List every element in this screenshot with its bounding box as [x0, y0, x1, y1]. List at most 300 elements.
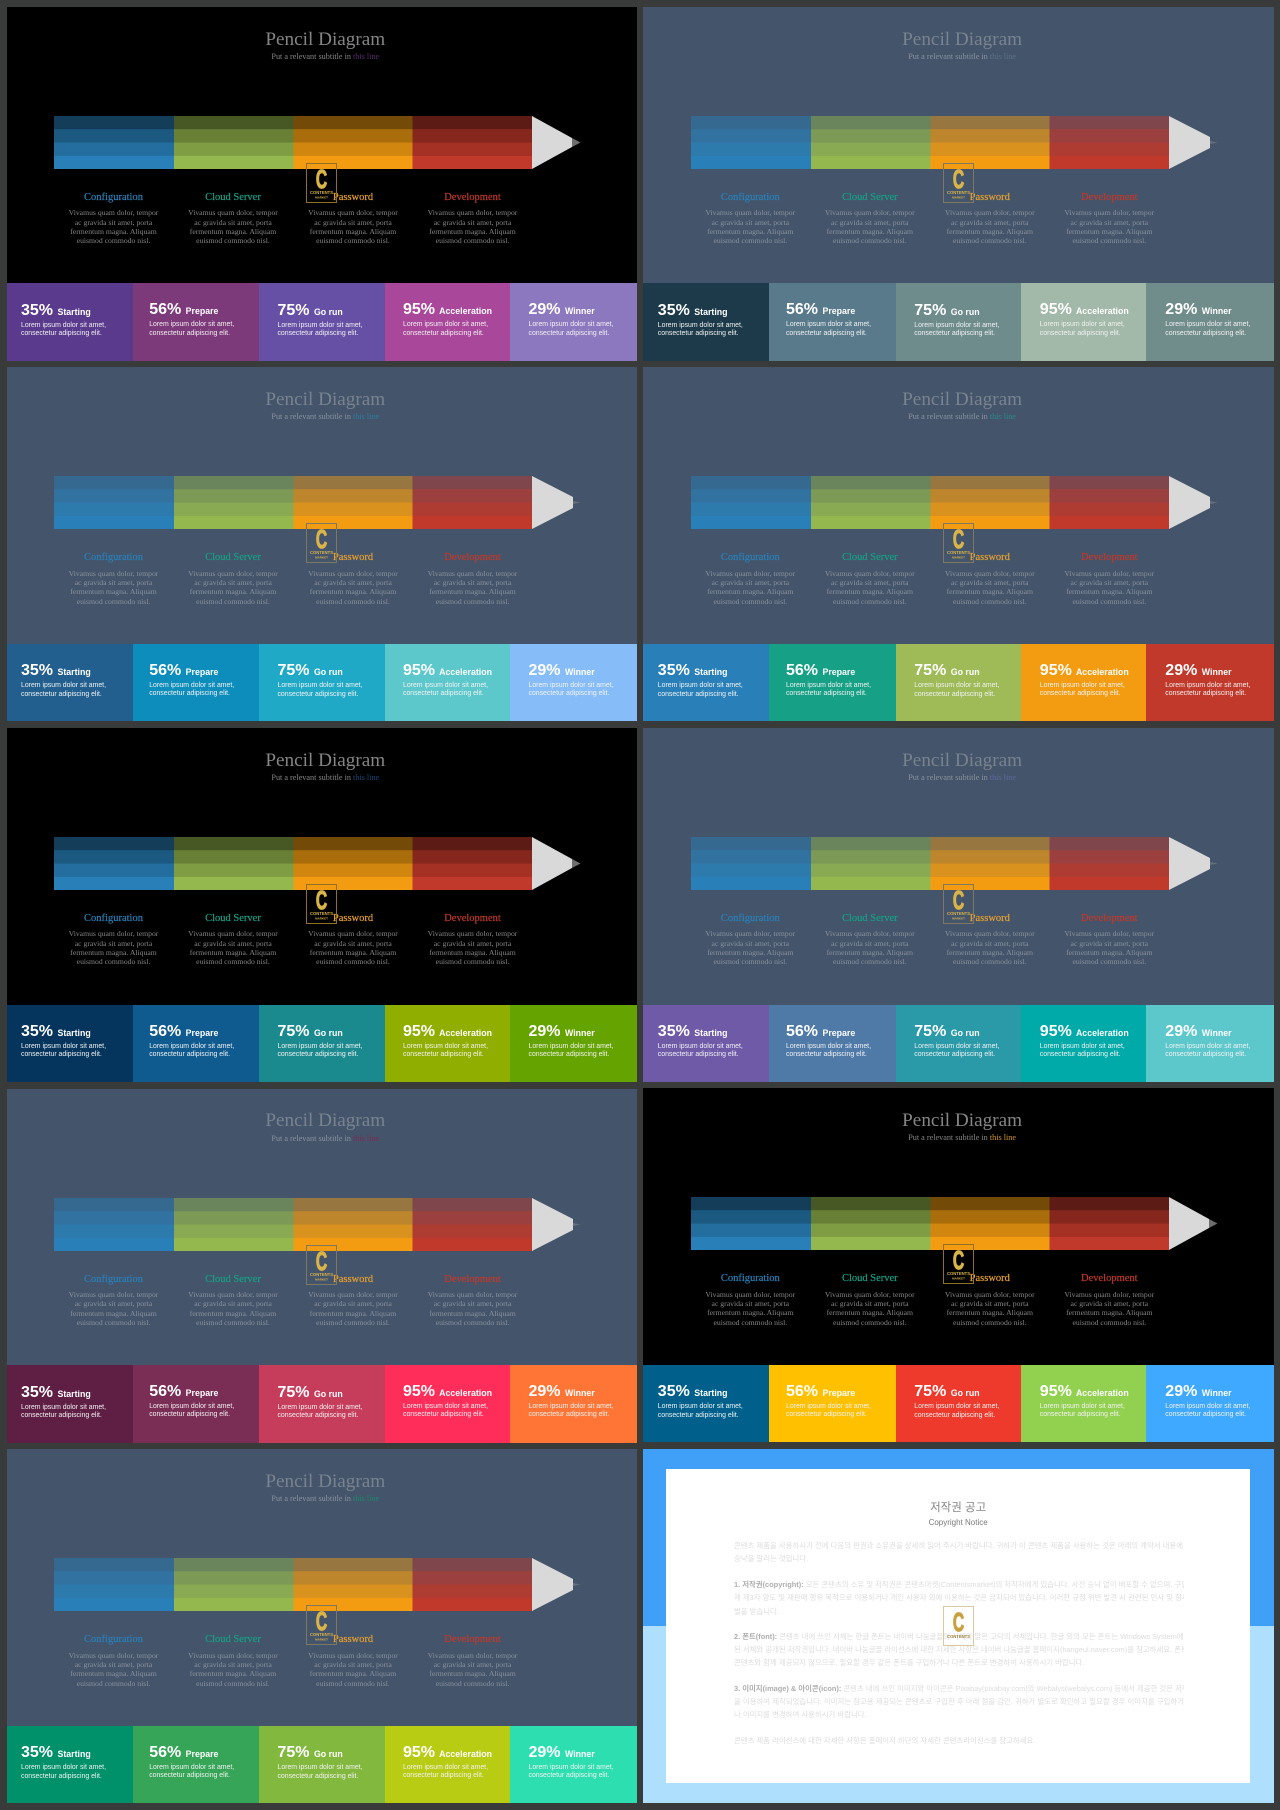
stat: starting: 35% Starting [658, 1383, 728, 1400]
stat: prepare [769, 283, 897, 361]
stat: winner: Lorem ipsum dolor sit amet, [528, 682, 614, 689]
column: cloud server: Vivamus quam dolor, tempor [825, 569, 915, 578]
column: configuration: Configuration [721, 192, 780, 203]
column: password: Vivamus quam dolor, tempor [945, 929, 1035, 938]
watermark icon: MARKET [315, 196, 328, 200]
panel: slide 1 black purple [6, 7, 637, 361]
column: development: fermentum magna. Aliquam [1066, 1308, 1153, 1317]
column: cloud server: Cloud Server [205, 192, 261, 203]
stat: winner: consectetur adipiscing elit. [1165, 1411, 1246, 1418]
column: configuration: euismod commodo nisl. [77, 1318, 150, 1327]
column: password [945, 192, 1035, 245]
column: development: Development [1081, 192, 1138, 203]
column: cloud server: fermentum magna. Aliquam [190, 227, 276, 236]
column: password [308, 913, 398, 966]
column: cloud server: ac gravida sit amet, porta [831, 939, 909, 948]
stat: acceleration: consectetur adipiscing elit. [1040, 1411, 1121, 1418]
stat: winner: 29% Winner [1165, 301, 1232, 318]
stat: starting: consectetur adipiscing elit. [21, 691, 102, 698]
column: password: ac gravida sit amet, porta [314, 218, 392, 227]
stat: winner [510, 1005, 637, 1082]
column: cloud server: ac gravida sit amet, porta [831, 218, 909, 227]
column: configuration: Vivamus quam dolor, tempor [705, 929, 795, 938]
column: cloud server: euismod commodo nisl. [833, 957, 907, 966]
stat: starting: 35% Starting [21, 302, 91, 319]
column: configuration: Vivamus quam dolor, tempor [69, 1651, 158, 1660]
watermark icon [943, 523, 974, 563]
stat: prepare: 56% Prepare [786, 662, 855, 679]
column: configuration [68, 552, 158, 606]
column: password: euismod commodo nisl. [953, 957, 1027, 966]
stat: prepare: Lorem ipsum dolor sit amet, [149, 1043, 234, 1050]
column: cloud server: euismod commodo nisl. [196, 1679, 270, 1688]
column: cloud server: Cloud Server [205, 552, 261, 563]
column: password: Vivamus quam dolor, tempor [308, 929, 398, 938]
stat: prepare: 56% Prepare [149, 1383, 218, 1400]
column: development: ac gravida sit amet, porta [434, 218, 511, 227]
stat: starting: consectetur adipiscing elit. [21, 330, 102, 337]
column: password: euismod commodo nisl. [316, 236, 390, 245]
notice body text: 나 이미지를 변경하여 사용하시기 바랍니다. [734, 1710, 867, 1719]
title: Pencil Diagram [265, 28, 385, 50]
column: development: fermentum magna. Aliquam [429, 1669, 516, 1678]
stat: starting: consectetur adipiscing elit. [21, 1412, 102, 1419]
stat: winner: consectetur adipiscing elit. [528, 1051, 609, 1058]
column: development: Development [444, 552, 501, 563]
stat: prepare: Lorem ipsum dolor sit amet, [786, 1043, 871, 1050]
column: password: euismod commodo nisl. [953, 1318, 1027, 1327]
stat: go run: consectetur adipiscing elit. [277, 691, 358, 698]
stat: go run [259, 644, 385, 721]
pencil diagram [54, 1558, 584, 1612]
column: cloud server: Cloud Server [842, 552, 898, 563]
column: development: ac gravida sit amet, porta [1071, 939, 1148, 948]
column: cloud server [815, 1272, 925, 1327]
title: Pencil Diagram [902, 389, 1022, 410]
column: cloud server: Vivamus quam dolor, tempor [188, 1290, 278, 1299]
watermark icon: C [953, 525, 964, 554]
watermark icon [306, 884, 337, 924]
stat: go run: consectetur adipiscing elit. [277, 1412, 358, 1419]
column: password: fermentum magna. Aliquam [310, 1309, 396, 1318]
column: configuration: Vivamus quam dolor, tempor [705, 1290, 795, 1299]
stat: acceleration: 95% Acceleration [403, 1023, 492, 1040]
stat: prepare: consectetur adipiscing elit. [786, 1051, 867, 1058]
column: password: Vivamus quam dolor, tempor [308, 569, 398, 578]
column: configuration: euismod commodo nisl. [713, 1318, 787, 1327]
watermark icon: C [953, 1246, 964, 1275]
column: cloud server: ac gravida sit amet, porta [831, 578, 909, 587]
column: cloud server: fermentum magna. Aliquam [827, 227, 913, 236]
stat: acceleration: 95% Acceleration [403, 1383, 492, 1400]
stat: prepare: consectetur adipiscing elit. [786, 1411, 867, 1418]
stat: go run [896, 1005, 1022, 1082]
column: cloud server: Vivamus quam dolor, tempor [188, 208, 278, 217]
stat: starting [643, 644, 770, 721]
stat: go run [896, 1365, 1022, 1442]
column: password: Password [333, 1634, 373, 1645]
stat: winner: Lorem ipsum dolor sit amet, [1165, 1043, 1250, 1050]
panel: slide 7 slate crimson [6, 1089, 637, 1443]
column: development: Vivamus quam dolor, tempor [1064, 929, 1154, 938]
stat: winner: 29% Winner [528, 662, 595, 679]
stat: acceleration: Lorem ipsum dolor sit amet, [403, 1764, 488, 1771]
stat: go run [259, 1005, 385, 1082]
stat: winner: Lorem ipsum dolor sit amet, [1165, 682, 1250, 689]
column: development: Vivamus quam dolor, tempor [428, 1651, 517, 1660]
column: development: Vivamus quam dolor, tempor [428, 929, 517, 938]
stat: winner: Lorem ipsum dolor sit amet, [528, 1403, 614, 1410]
watermark icon: MARKET [315, 917, 328, 921]
stat: go run: 75% Go run [914, 1383, 980, 1400]
column: cloud server: euismod commodo nisl. [833, 236, 907, 245]
stat: starting [643, 1365, 770, 1442]
stat: winner [510, 283, 637, 361]
column: development: fermentum magna. Aliquam [429, 1309, 516, 1318]
watermark icon: C [316, 165, 327, 194]
stat: go run: 75% Go run [277, 1384, 343, 1401]
watermark icon [943, 1606, 974, 1646]
stat: winner [1146, 283, 1274, 361]
column: configuration: Vivamus quam dolor, tempor [69, 1290, 158, 1299]
column: configuration: Configuration [84, 1274, 143, 1285]
stat: go run: consectetur adipiscing elit. [914, 330, 995, 337]
column: password: fermentum magna. Aliquam [947, 587, 1033, 596]
column: password: Password [970, 913, 1010, 924]
watermark icon [943, 884, 974, 924]
stat: prepare: Lorem ipsum dolor sit amet, [786, 1403, 871, 1410]
stat: go run: 75% Go run [277, 302, 343, 319]
column: development: euismod commodo nisl. [436, 597, 509, 606]
notice body text: 승낙을 알리는 것입니다. [734, 1554, 808, 1563]
column: cloud server: Cloud Server [205, 913, 261, 924]
column: development [1054, 912, 1164, 967]
column: cloud server [178, 1273, 288, 1327]
watermark icon: MARKET [952, 1277, 965, 1281]
column: configuration [695, 1272, 805, 1327]
watermark icon: C [316, 886, 327, 915]
column: password: Vivamus quam dolor, tempor [945, 569, 1035, 578]
watermark icon: C [316, 1607, 327, 1636]
column: development: Development [444, 192, 501, 203]
stat: starting: 35% Starting [21, 1023, 91, 1040]
column: password [298, 1273, 408, 1327]
stat: go run: 75% Go run [277, 662, 343, 679]
column: development: euismod commodo nisl. [1072, 1318, 1146, 1327]
column: password [298, 1633, 408, 1688]
stat: acceleration: consectetur adipiscing elit. [1040, 1051, 1121, 1058]
column: configuration: Vivamus quam dolor, tempor [69, 929, 158, 938]
stat: winner [1146, 644, 1274, 721]
column: cloud server: Vivamus quam dolor, tempor [188, 569, 278, 578]
column: password: ac gravida sit amet, porta [314, 1660, 392, 1669]
stat: acceleration: Lorem ipsum dolor sit amet, [1040, 682, 1125, 689]
column: password: Vivamus quam dolor, tempor [945, 1290, 1035, 1299]
stat: acceleration: 95% Acceleration [403, 301, 492, 318]
watermark icon [306, 1605, 337, 1645]
stat: prepare: 56% Prepare [149, 1023, 218, 1040]
column: password: euismod commodo nisl. [316, 597, 390, 606]
subtitle: Put a relevant subtitle in this line [908, 412, 1016, 421]
column: cloud server [188, 913, 278, 966]
column: development: euismod commodo nisl. [1072, 957, 1146, 966]
stat: acceleration: Lorem ipsum dolor sit amet, [403, 1043, 488, 1050]
stat: acceleration: Lorem ipsum dolor sit amet, [1040, 321, 1125, 328]
column: cloud server: Vivamus quam dolor, tempor [188, 929, 278, 938]
column: cloud server: Cloud Server [842, 1273, 898, 1284]
watermark icon [306, 163, 337, 203]
subtitle: Put a relevant subtitle in this line [271, 52, 379, 61]
column: development: euismod commodo nisl. [1072, 597, 1146, 606]
column: development [1054, 1272, 1164, 1327]
stat: go run: Lorem ipsum dolor sit amet, [914, 1043, 999, 1050]
notice title: 저작권 공고 [930, 1502, 986, 1514]
column: development [1064, 192, 1154, 245]
column: development: ac gravida sit amet, porta [434, 1299, 511, 1308]
column: development: euismod commodo nisl. [436, 1679, 509, 1688]
watermark icon: C [953, 165, 964, 194]
stat: starting: 35% Starting [658, 1023, 728, 1040]
column: cloud server: ac gravida sit amet, porta [194, 1299, 272, 1308]
column: development: Development [1081, 552, 1138, 563]
column: development: fermentum magna. Aliquam [429, 587, 516, 596]
notice body text: 1. 저작권(copyright): 모든 콘텐츠의 소유 및 저작권은 콘텐츠마켓(Contentsmarket)의 저작자에게 있습니다. 사전 승낙 없이 배포할 수 없으며, 구입한 [734, 1580, 1184, 1589]
stat: starting: 35% Starting [21, 662, 91, 679]
column: cloud server: fermentum magna. Aliquam [190, 948, 276, 957]
panel: slide 5 black navy green [6, 728, 637, 1082]
column: cloud server: Cloud Server [205, 1274, 261, 1285]
stat: acceleration [384, 1365, 510, 1443]
column: configuration: fermentum magna. Aliquam [70, 1309, 157, 1318]
title: Pencil Diagram [265, 1110, 385, 1131]
watermark icon: CONTENTS [947, 190, 970, 195]
column: configuration: Vivamus quam dolor, tempor [705, 208, 795, 217]
stat: prepare: consectetur adipiscing elit. [149, 1051, 230, 1058]
watermark icon: C [953, 886, 964, 915]
column: configuration: fermentum magna. Aliquam [70, 227, 157, 236]
stat: go run: consectetur adipiscing elit. [914, 1412, 995, 1419]
column: configuration [68, 913, 158, 966]
watermark icon: CONTENTS [310, 190, 333, 195]
column: password: Password [970, 1273, 1010, 1284]
column: password: ac gravida sit amet, porta [951, 939, 1029, 948]
stat: starting: consectetur adipiscing elit. [21, 1051, 102, 1058]
stat: winner [510, 1726, 637, 1803]
stat: prepare [769, 644, 897, 721]
stat: acceleration: consectetur adipiscing elit. [403, 1051, 484, 1058]
stat: winner: 29% Winner [528, 301, 595, 318]
column: configuration: Vivamus quam dolor, tempor [69, 569, 158, 578]
column: password: euismod commodo nisl. [953, 597, 1027, 606]
stat: starting: consectetur adipiscing elit. [21, 1773, 102, 1780]
column: password: Password [333, 913, 373, 924]
subtitle: Put a relevant subtitle in this line [908, 773, 1016, 782]
pencil diagram [691, 1197, 1221, 1251]
column: development: Vivamus quam dolor, tempor [1064, 1290, 1154, 1299]
notice subtitle: Copyright Notice [929, 1518, 988, 1527]
column: development: fermentum magna. Aliquam [1066, 227, 1153, 236]
watermark icon: MARKET [952, 196, 965, 200]
column: development: Vivamus quam dolor, tempor [428, 208, 517, 217]
watermark icon: C [316, 1247, 327, 1276]
watermark icon: CONTENTS [947, 550, 970, 555]
stat: winner: 29% Winner [528, 1383, 595, 1400]
notice body text [666, 1469, 1250, 1782]
pencil diagram [54, 116, 580, 169]
watermark icon: C [953, 1608, 964, 1637]
column: cloud server: euismod commodo nisl. [833, 1318, 907, 1327]
column: development: fermentum magna. Aliquam [1066, 587, 1153, 596]
column: configuration: ac gravida sit amet, porta [75, 218, 152, 227]
column: development: Vivamus quam dolor, tempor [1064, 208, 1154, 217]
stat: acceleration: Lorem ipsum dolor sit amet, [1040, 1403, 1125, 1410]
column: configuration [705, 192, 796, 245]
stat: prepare [133, 1726, 260, 1803]
stat: acceleration: Lorem ipsum dolor sit amet, [403, 1403, 488, 1410]
column: development [418, 1633, 528, 1688]
stat: go run: 75% Go run [277, 1744, 343, 1761]
stat: starting: Lorem ipsum dolor sit amet, [658, 1043, 743, 1050]
watermark icon: CONTENTS [947, 1271, 970, 1276]
stat: winner: Lorem ipsum dolor sit amet, [1165, 321, 1250, 328]
column: cloud server: euismod commodo nisl. [196, 597, 270, 606]
stat: winner: 29% Winner [1165, 1023, 1232, 1040]
title: Pencil Diagram [265, 1471, 385, 1492]
stat: winner: 29% Winner [1165, 662, 1232, 679]
stat: winner: 29% Winner [528, 1023, 595, 1040]
stat: prepare: 56% Prepare [149, 301, 218, 318]
column: configuration: fermentum magna. Aliquam [70, 948, 157, 957]
stat: acceleration: 95% Acceleration [1040, 662, 1129, 679]
column: development: ac gravida sit amet, porta [434, 1660, 511, 1669]
stat: go run: Lorem ipsum dolor sit amet, [277, 322, 363, 329]
stat: starting [6, 1005, 134, 1082]
stat: prepare [133, 1005, 260, 1082]
title: Pencil Diagram [902, 1110, 1022, 1131]
stat: go run [896, 644, 1022, 721]
stat: winner: 29% Winner [1165, 1383, 1232, 1400]
stat: go run: consectetur adipiscing elit. [914, 1051, 995, 1058]
stat: go run: Lorem ipsum dolor sit amet, [277, 1404, 363, 1411]
title: Pencil Diagram [902, 28, 1022, 50]
stat: winner: consectetur adipiscing elit. [528, 1772, 609, 1779]
stats band [643, 644, 1274, 721]
watermark icon [306, 523, 337, 563]
column: cloud server [178, 1633, 288, 1688]
stats band [7, 644, 637, 721]
column: cloud server [815, 912, 925, 967]
column: password: ac gravida sit amet, porta [314, 578, 392, 587]
column: password: fermentum magna. Aliquam [310, 948, 396, 957]
stat: go run: Lorem ipsum dolor sit amet, [914, 1403, 999, 1410]
column: configuration: euismod commodo nisl. [77, 957, 150, 966]
panel: slide 9 slate green [6, 1449, 637, 1803]
panel: copyright notice [643, 1449, 1274, 1803]
stat: starting: 35% Starting [21, 1384, 91, 1401]
subtitle: Put a relevant subtitle in this line [271, 773, 379, 782]
stat: starting [643, 283, 770, 361]
column: configuration: ac gravida sit amet, porta [712, 939, 789, 948]
column: development: ac gravida sit amet, porta [434, 578, 511, 587]
pencil diagram [691, 476, 1217, 529]
pencil diagram [691, 116, 1217, 169]
column: password: euismod commodo nisl. [316, 1679, 390, 1688]
stat: acceleration: consectetur adipiscing elit. [403, 690, 484, 697]
column: cloud server: ac gravida sit amet, porta [831, 1299, 909, 1308]
stats band [7, 283, 637, 361]
stat: winner [1146, 1005, 1274, 1082]
stat: acceleration [384, 283, 510, 361]
column: development: Development [444, 913, 501, 924]
white notice card [666, 1469, 1250, 1783]
stat: winner: Lorem ipsum dolor sit amet, [1165, 1403, 1250, 1410]
column: password: ac gravida sit amet, porta [314, 939, 392, 948]
stat: winner: consectetur adipiscing elit. [528, 1411, 609, 1418]
subtitle: Put a relevant subtitle in this line [271, 412, 379, 421]
subtitle: Put a relevant subtitle in this line [271, 1134, 379, 1143]
stat: acceleration [1021, 283, 1147, 361]
column: cloud server: fermentum magna. Aliquam [190, 1669, 276, 1678]
watermark icon: CONTENTS [310, 911, 333, 916]
column: development: fermentum magna. Aliquam [429, 227, 516, 236]
stat: prepare: 56% Prepare [786, 1383, 855, 1400]
stat: prepare: consectetur adipiscing elit. [149, 1772, 230, 1779]
stats band [643, 1365, 1274, 1442]
column: configuration: Configuration [84, 1634, 143, 1645]
column: development: Development [444, 1274, 501, 1285]
panel: slide 3 slate blue [6, 367, 637, 721]
stat: go run: consectetur adipiscing elit. [277, 330, 358, 337]
column: cloud server [825, 192, 915, 245]
column: development: ac gravida sit amet, porta [1071, 578, 1148, 587]
stat: prepare: consectetur adipiscing elit. [149, 330, 230, 337]
column: password: fermentum magna. Aliquam [947, 227, 1033, 236]
column: configuration [695, 912, 805, 967]
column: configuration: ac gravida sit amet, porta [712, 1299, 789, 1308]
column: cloud server: ac gravida sit amet, porta [194, 218, 272, 227]
stat: go run: consectetur adipiscing elit. [277, 1051, 358, 1058]
stat: prepare: Lorem ipsum dolor sit amet, [149, 321, 234, 328]
column: configuration: Configuration [721, 552, 780, 563]
stat: acceleration [1021, 1365, 1147, 1442]
stat: starting: Lorem ipsum dolor sit amet, [21, 1043, 106, 1050]
column: development: euismod commodo nisl. [436, 236, 509, 245]
column: cloud server: euismod commodo nisl. [196, 236, 270, 245]
column: configuration: fermentum magna. Aliquam [707, 227, 794, 236]
column: configuration: fermentum magna. Aliquam [70, 1669, 157, 1678]
column: password: euismod commodo nisl. [316, 1318, 390, 1327]
column: development [428, 913, 518, 966]
stat: winner: consectetur adipiscing elit. [528, 690, 609, 697]
column: configuration: euismod commodo nisl. [77, 1679, 150, 1688]
stat: acceleration [384, 1005, 510, 1082]
column: configuration: Configuration [721, 1273, 780, 1284]
stats band [643, 283, 1274, 361]
pencil diagram [691, 837, 1221, 891]
notice body text: 을 이용하여 제작되었습니다. 이미지는 참고용 제공되는 콘텐츠로 구입한 후 아래 점을 감안, 귀하가 별도로 확인하고 필요할 경우 이미지를 구입하거 [734, 1697, 1184, 1706]
column: password: fermentum magna. Aliquam [310, 227, 396, 236]
stat: prepare: consectetur adipiscing elit. [149, 1411, 230, 1418]
stat: go run [896, 283, 1022, 361]
column: configuration: fermentum magna. Aliquam [70, 587, 157, 596]
stat: acceleration: 95% Acceleration [403, 662, 492, 679]
column: development: Development [1081, 913, 1138, 924]
stat: starting: Lorem ipsum dolor sit amet, [21, 1404, 106, 1411]
column: configuration: Configuration [84, 913, 143, 924]
stat: go run [259, 1726, 385, 1803]
notice body text: 벌을 받습니다. [734, 1607, 779, 1616]
stat: winner: consectetur adipiscing elit. [1165, 330, 1246, 337]
